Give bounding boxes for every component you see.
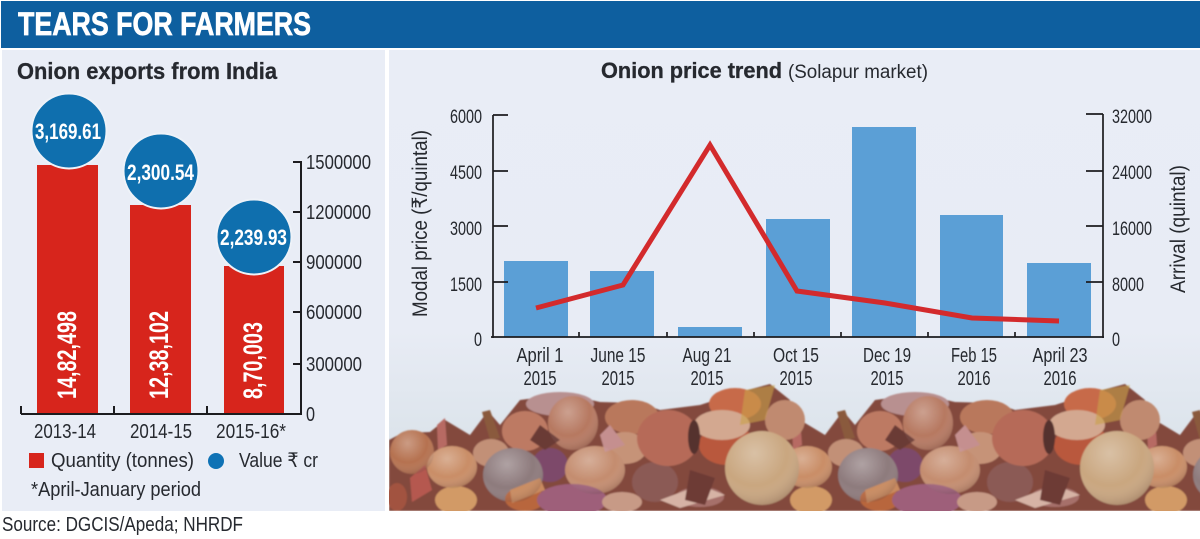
left axis title: Modal price (₹/quintal) [409, 130, 432, 317]
price line [536, 145, 1059, 321]
date labels: 2016 [958, 368, 990, 390]
year labels: 2015-16* [216, 421, 286, 443]
title bar [1, 1, 1200, 48]
quantity axis: 300000 [306, 354, 362, 376]
source line: Source: DGCIS/Apeda; NHRDF [2, 514, 243, 536]
footnote: *April-January period [31, 479, 201, 501]
date labels: 2015 [524, 368, 556, 390]
year labels: 2013-14 [34, 421, 96, 443]
bar: 2013-14 [32, 94, 106, 414]
left axis labels: 4500 [450, 163, 482, 184]
bar: 2013-14: 3,169.61 [35, 119, 101, 144]
date labels [516, 345, 1088, 390]
right axis labels: 8000 [1112, 275, 1144, 296]
legend: Value ₹ cr [239, 450, 318, 472]
arrival bars [504, 127, 1091, 337]
bar: 2014-15: 2,300.54 [127, 160, 195, 185]
date labels: 2015 [780, 368, 812, 390]
bar: 2015-16: 8,70,003 [238, 322, 268, 399]
date labels: Oct 15 [773, 345, 819, 367]
subheading: Solapur market: (Solapur market) [788, 62, 928, 83]
year labels: 2014-15 [130, 421, 192, 443]
bar: 2014-15: 12,38,102 [144, 311, 174, 399]
right axis labels: 0 [1112, 330, 1120, 351]
year labels [34, 421, 286, 443]
date labels: Aug 21 [682, 345, 732, 367]
date labels: 2016 [1044, 368, 1076, 390]
legend [29, 450, 318, 472]
quantity axis: 600000 [306, 302, 362, 324]
bar: 2014-15 [124, 134, 198, 414]
left axis labels: 3000 [450, 219, 482, 240]
date labels: Dec 19 [863, 345, 911, 367]
panel: onion exports from India [2, 50, 385, 511]
title bar: TEARS FOR FARMERS [18, 6, 311, 42]
right axis labels: 24000 [1112, 163, 1152, 184]
date labels: April 23 [1032, 345, 1088, 367]
bar: 2015-16: 2,239.93 [220, 225, 287, 250]
right axis labels: 16000 [1112, 219, 1152, 240]
date labels: June 15 [590, 345, 646, 367]
date labels: 2015 [602, 368, 634, 390]
quantity axis [21, 152, 371, 426]
panel: onion price trend [387, 50, 1200, 516]
bar: 2015-16 [216, 200, 292, 414]
date labels: 2015 [690, 368, 724, 390]
legend: Quantity (tonnes) [51, 450, 194, 472]
heading: onion price trend: Onion price trend [601, 58, 782, 83]
quantity axis: 1500000 [306, 152, 371, 174]
right axis labels: 32000 [1112, 107, 1152, 128]
onion photo [387, 384, 1200, 516]
left axis labels: 1500 [450, 275, 482, 296]
date labels: 2015 [870, 368, 904, 390]
chart axes [491, 114, 1104, 338]
left axis labels [450, 107, 482, 351]
heading: onion exports: Onion exports from India [17, 58, 277, 84]
quantity axis: 0 [306, 404, 315, 426]
date labels: Feb 15 [951, 345, 997, 367]
left axis labels: 6000 [450, 107, 482, 128]
date labels: April 1 [516, 345, 564, 367]
left axis labels: 0 [474, 330, 482, 351]
right axis title: Arrival (quintal) [1167, 165, 1190, 293]
quantity axis: 900000 [306, 252, 362, 274]
quantity axis: 1200000 [306, 202, 371, 224]
right axis labels [1112, 107, 1152, 351]
bar: 2013-14: 14,82,498 [52, 311, 82, 399]
